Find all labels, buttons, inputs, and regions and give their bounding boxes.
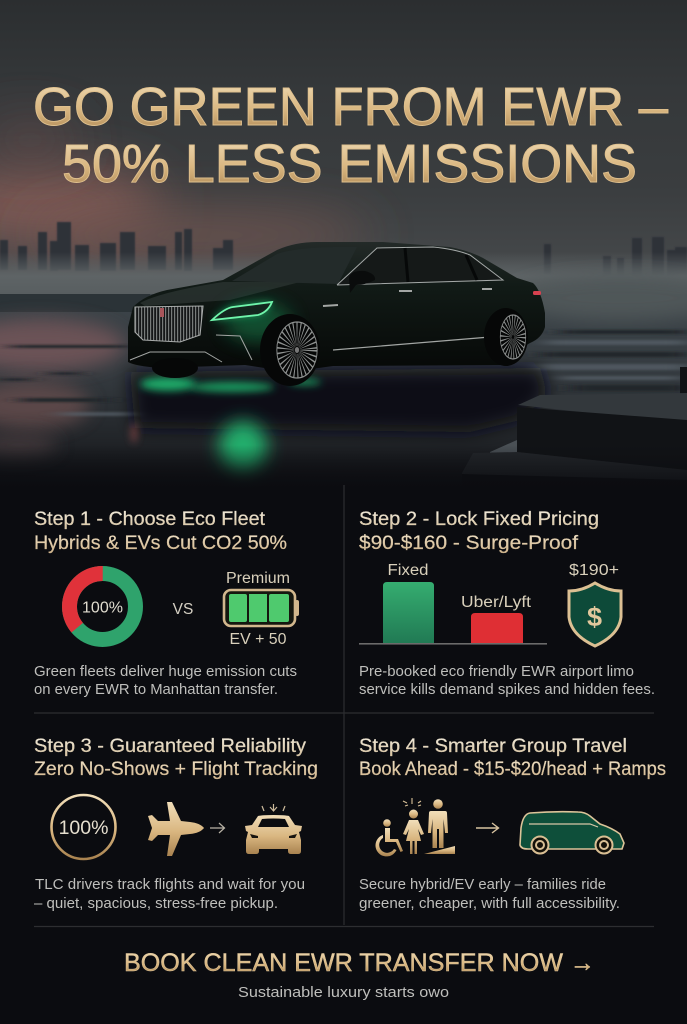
step 1 description: on every EWR to Manhattan transfer.	[34, 681, 278, 698]
donut chart 100%: 100%	[82, 600, 123, 616]
grille	[135, 306, 203, 342]
arrow: plane to car	[210, 823, 224, 833]
step 2 description: service kills demand spikes and hidden fees.	[359, 681, 655, 698]
bar chart: fixed vs uber/lyft: Fixed	[388, 562, 428, 579]
background photo: stormy skyline and wet ground	[0, 0, 687, 490]
step 3 heading	[34, 736, 318, 780]
front left tyre	[152, 358, 198, 378]
step 3 description: TLC drivers track flights and wait for you	[35, 876, 305, 893]
front wheel	[260, 314, 320, 386]
step 2 heading: $90-$160 - Surge-Proof	[359, 533, 579, 554]
step 1 heading: Hybrids & EVs Cut CO2 50%	[34, 533, 287, 554]
title: 50% LESS EMISSIONS	[62, 134, 637, 194]
donut chart 100%	[56, 560, 149, 653]
step 2 description	[359, 663, 655, 698]
call to action	[124, 949, 595, 1001]
shield icon with dollar: $190+: $190+	[569, 562, 619, 579]
step 2 heading: Step 2 - Lock Fixed Pricing	[359, 509, 599, 530]
rear wheel	[484, 308, 528, 366]
step 4 heading: Book Ahead - $15-$20/head + Ramps	[359, 759, 666, 780]
step 4 description: Secure hybrid/EV early – families ride	[359, 876, 606, 893]
bottom fade into panel	[0, 445, 687, 492]
step 3 description	[34, 876, 305, 912]
headlight	[212, 302, 272, 320]
icon: car pickup	[245, 804, 302, 854]
step 4 description	[359, 876, 620, 912]
shield icon with dollar: $190+	[569, 562, 621, 646]
bar chart: fixed vs uber/lyft: Uber/Lyft	[461, 594, 532, 611]
vs label: VS	[173, 601, 193, 618]
side windows with chrome trim	[337, 247, 503, 285]
hood sheen	[140, 282, 300, 306]
concrete steps foreground	[462, 367, 687, 490]
bar chart: fixed vs uber/lyft	[359, 562, 547, 645]
title	[33, 77, 668, 194]
battery icon: premium EV +50: Premium	[226, 570, 290, 587]
mirror	[349, 271, 375, 293]
ring badge 100%: 100%	[59, 817, 108, 839]
panel: step 2	[359, 509, 655, 698]
battery icon: premium EV +50: EV + 50	[230, 631, 287, 648]
battery icon: premium EV +50	[224, 570, 299, 648]
step 1 heading: Step 1 - Choose Eco Fleet	[34, 509, 266, 530]
icon: green van	[520, 812, 624, 854]
windshield	[232, 247, 357, 284]
ring badge 100%	[52, 795, 116, 859]
step 1 description: Green fleets deliver huge emission cuts	[34, 663, 297, 680]
tagline: Sustainable luxury starts owo	[238, 984, 449, 1001]
body trim	[130, 289, 492, 362]
step 2 description: Pre-booked eco friendly EWR airport limo	[359, 663, 634, 680]
hero: black luxury sedan	[128, 242, 545, 386]
step 2 heading	[359, 509, 599, 554]
title: GO GREEN FROM EWR –	[33, 77, 668, 137]
step 3 description: – quiet, spacious, stress-free pickup.	[34, 895, 278, 912]
fender glow	[224, 302, 292, 342]
panel: step 4	[359, 736, 666, 912]
step 1 heading	[34, 509, 287, 554]
step 1 description	[34, 663, 297, 698]
shield icon with dollar: $190+: $	[587, 602, 602, 632]
step 3 heading: Step 3 - Guaranteed Reliability	[34, 736, 307, 757]
icon: airplane	[148, 802, 204, 856]
arrow: group to van	[476, 823, 498, 833]
panel: step 3	[34, 736, 318, 912]
green light reflection on wet ground	[131, 377, 321, 473]
step 3 heading: Zero No-Shows + Flight Tracking	[34, 759, 318, 780]
panel: step 1	[34, 509, 299, 698]
icon: family and wheelchair with ramp	[375, 798, 455, 856]
step 4 description: greener, cheaper, with full accessibility.	[359, 895, 620, 912]
step 4 heading	[359, 736, 666, 780]
step 4 heading: Step 4 - Smarter Group Travel	[359, 736, 627, 757]
dark info panel	[0, 490, 687, 1024]
call to action: BOOK CLEAN EWR TRANSFER NOW →	[124, 949, 595, 977]
